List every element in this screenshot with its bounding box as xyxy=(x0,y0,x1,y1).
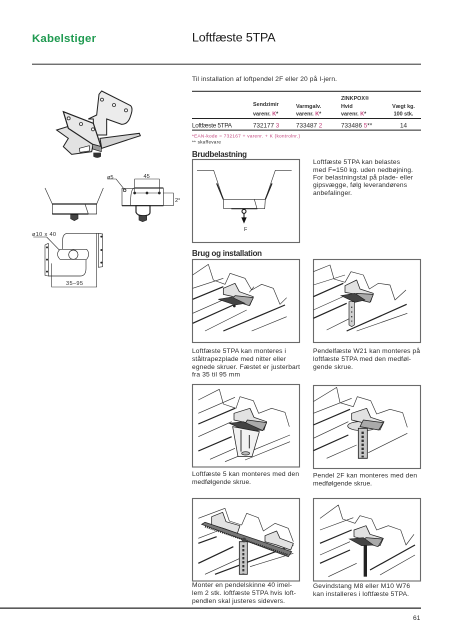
product table: Varmgalv. xyxy=(296,104,322,110)
caption: panel 5: lem 2 stk. loftfæste 5TPA hvis loft- xyxy=(192,590,296,597)
side view drawing with dimensions xyxy=(107,179,173,222)
product table: Loftfæste 5TPA xyxy=(192,122,233,130)
caption: panel 5: Monter en pendelskinne 40 imel- xyxy=(192,582,292,589)
caption: panel 6: Gevindstang M8 eller M10 W76 xyxy=(313,583,410,590)
caption: panel 2: gende skrue. xyxy=(313,364,353,371)
label: adjustment range: 35–95 xyxy=(66,281,83,287)
caption: panel 2: Pendelfæste W21 kan monteres på xyxy=(313,347,420,355)
label: hole 5: ø5 xyxy=(107,175,114,181)
heading: Brug og installation: Brug og installation xyxy=(192,249,262,258)
caption: panel 1 xyxy=(192,348,300,378)
panel: pendant 2F xyxy=(313,386,420,468)
caption: panel 1: egnede skruer. Fæstet er justerbart xyxy=(192,364,300,371)
caption: panel 3: medfølgende skrue. xyxy=(192,479,251,486)
label: 2 degrees: 2° xyxy=(175,198,180,204)
caption: panel 1: Loftfæste 5TPA kan monteres i xyxy=(192,348,287,355)
caption: panel 4: Pendel 2F kan monteres med den xyxy=(313,472,417,480)
caption: panel 4: medfølgende skrue. xyxy=(313,480,372,488)
load description: Loftfæste 5TPA kan belastes xyxy=(313,159,401,166)
section title: Kabelstiger: Kabelstiger xyxy=(32,33,97,45)
product table: Sendzimir xyxy=(253,102,280,108)
caption: panel 5: pendlen skal justeres sidevers. xyxy=(192,598,285,605)
product table: 733487 2 xyxy=(296,122,323,130)
load description: For belastningstal på plade- eller xyxy=(313,174,414,182)
caption: panel 3 xyxy=(192,471,299,486)
intro text: Til installation af loftpendel 2F eller 20 på I-jern. xyxy=(192,75,337,83)
panel: threaded rod xyxy=(314,498,420,581)
caption: panel 3: Loftfæste 5 kan monteres med den xyxy=(192,471,299,478)
load description xyxy=(313,159,414,197)
product table: varenr. K* xyxy=(253,112,279,118)
panel: pendant rail between two brackets xyxy=(192,498,300,581)
footer rule xyxy=(0,608,421,609)
product table: 14 xyxy=(400,122,407,130)
panel: pendant bracket W21 xyxy=(313,260,420,342)
top-down view drawing with dimensions xyxy=(33,233,103,287)
product table: ZINKPOX® xyxy=(341,95,369,102)
caption: panel 2 xyxy=(313,347,420,371)
footnote xyxy=(192,134,300,144)
footnote: ** skaffevare xyxy=(192,140,221,144)
caption: panel 2: loftfæste 5TPA med den medføl- xyxy=(313,356,411,363)
front view drawing xyxy=(45,188,103,221)
caption: panel 1: fra 35 til 95 mm xyxy=(192,372,240,378)
product table: Vægt kg. xyxy=(392,104,415,110)
product table: varenr. K* xyxy=(341,112,367,118)
product table: varenr. K* xyxy=(296,112,322,118)
header rule xyxy=(32,63,421,66)
heading: Brudbelastning: Brudbelastning xyxy=(192,150,247,159)
product table: Hvid xyxy=(341,104,353,110)
product title: Loftfæste 5TPA xyxy=(192,30,276,44)
label: 45: 45 xyxy=(144,174,150,180)
panel: breaking load diagram: F xyxy=(244,227,248,233)
load description: gipsvægge, følg leverandørens xyxy=(313,182,408,189)
panel: bracket 5 xyxy=(192,384,300,467)
product table xyxy=(192,91,421,131)
caption: panel 1: ståltrapezplade med nitter eller xyxy=(192,355,287,363)
load description: anbefalinger. xyxy=(313,190,352,197)
caption: panel 6 xyxy=(313,583,410,598)
caption: panel 4 xyxy=(313,472,417,488)
product table: 732177 3 xyxy=(253,122,280,130)
product table: 100 stk. xyxy=(394,112,414,118)
footnote: *EAN-kode = 732167 + varenr. + K (kontrolnr.) xyxy=(192,134,300,138)
isometric bracket illustration xyxy=(57,91,140,158)
page number: 61 xyxy=(413,615,421,622)
load description: med F=150 kg. uden nedbøjning. xyxy=(313,167,413,174)
label: slot size: ø10 x 40 xyxy=(32,232,56,238)
product table: 733486 5** xyxy=(341,122,373,130)
panel: breaking load diagram xyxy=(192,160,300,242)
caption: panel 6: kan installeres i loftfæste 5TPA. xyxy=(313,591,409,598)
panel: mounting on trapezoid plate xyxy=(192,260,300,342)
caption: panel 5 xyxy=(192,582,296,605)
